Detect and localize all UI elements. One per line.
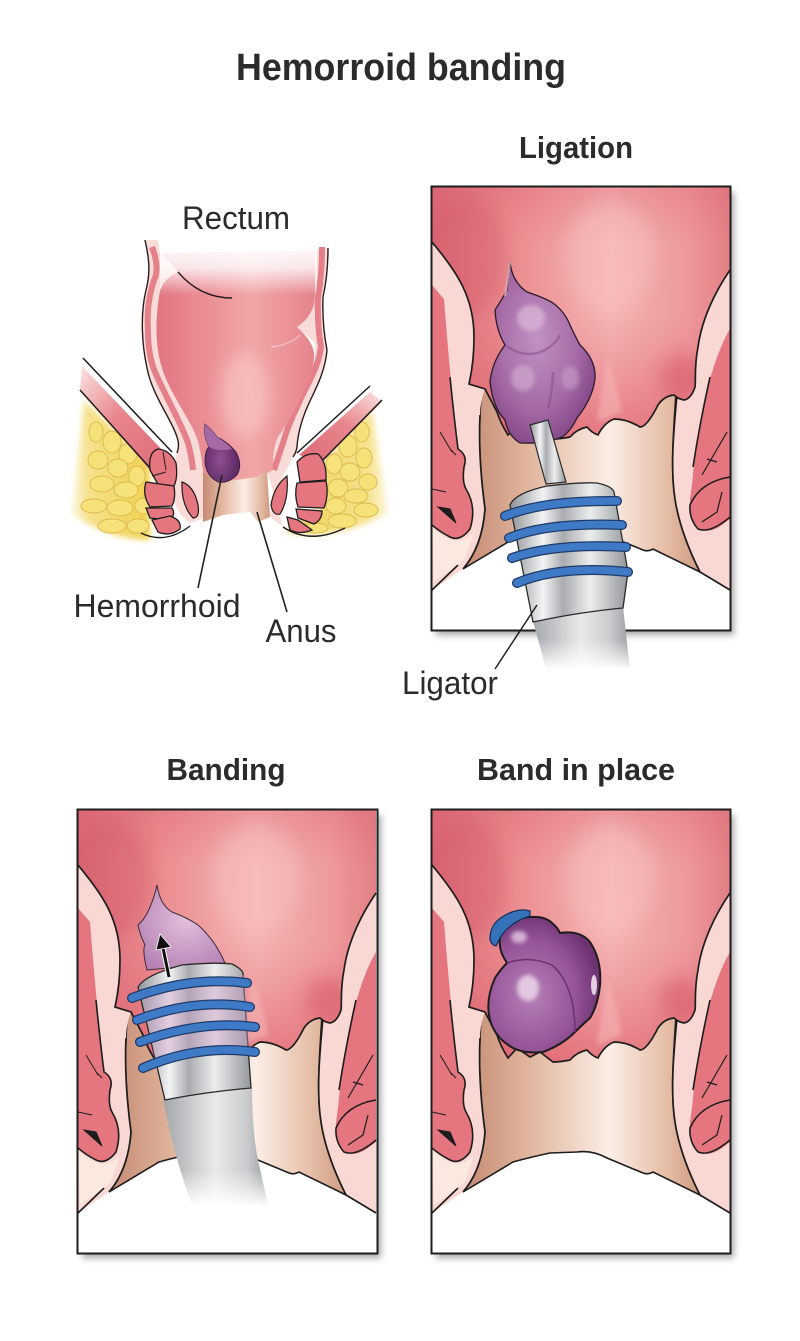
left wall of rectum — [142, 240, 207, 523]
heading: Banding: Banding — [166, 752, 286, 787]
rubber bands — [505, 501, 628, 583]
label: Rectum: Rectum — [182, 200, 290, 236]
large sphincter left — [145, 449, 180, 534]
label: Hemorrhoid: Hemorrhoid — [74, 588, 240, 624]
fat tissue right — [285, 410, 388, 534]
muscle stripes — [148, 247, 322, 470]
levator muscle left — [80, 366, 168, 470]
panel: band in place — [417, 810, 730, 1254]
translucent hemorrhoid in head — [142, 975, 249, 1060]
ligator head — [510, 483, 628, 622]
leader: anus — [257, 512, 287, 612]
leader: hemorrhoid — [198, 475, 222, 588]
fat tissue left — [72, 400, 153, 540]
panel: anatomy overview — [72, 200, 388, 649]
ligator needle — [530, 420, 566, 484]
highlight and folds of rectum — [221, 353, 269, 437]
heading: Ligation: Ligation — [519, 130, 633, 165]
leader: ligator — [495, 605, 537, 669]
title: Hemorroid banding — [236, 47, 566, 89]
panel: banding — [63, 810, 378, 1254]
ligator tube — [163, 1088, 275, 1206]
rubber band — [490, 910, 530, 946]
arrow — [156, 934, 171, 977]
levator muscle right — [299, 392, 382, 462]
label: Ligator: Ligator — [402, 665, 498, 701]
ligator tube — [530, 606, 635, 670]
base outlines — [141, 526, 345, 538]
anal canal skin — [203, 470, 270, 522]
hemorrhoid inside ligator — [138, 885, 225, 970]
hemorrhoid — [490, 262, 595, 443]
hemorrhoid — [204, 424, 240, 482]
heading: Band in place: Band in place — [477, 752, 675, 787]
small sphincter left — [182, 482, 198, 518]
ligator head — [138, 963, 251, 1100]
small sphincter right — [271, 476, 287, 514]
label: Anus: Anus — [266, 613, 336, 649]
rubber bands — [132, 981, 255, 1068]
rectum body — [156, 250, 315, 481]
right wall of rectum — [267, 248, 328, 527]
panel: ligation — [402, 186, 730, 701]
large sphincter right — [287, 454, 327, 532]
banded hemorrhoid — [488, 917, 600, 1052]
